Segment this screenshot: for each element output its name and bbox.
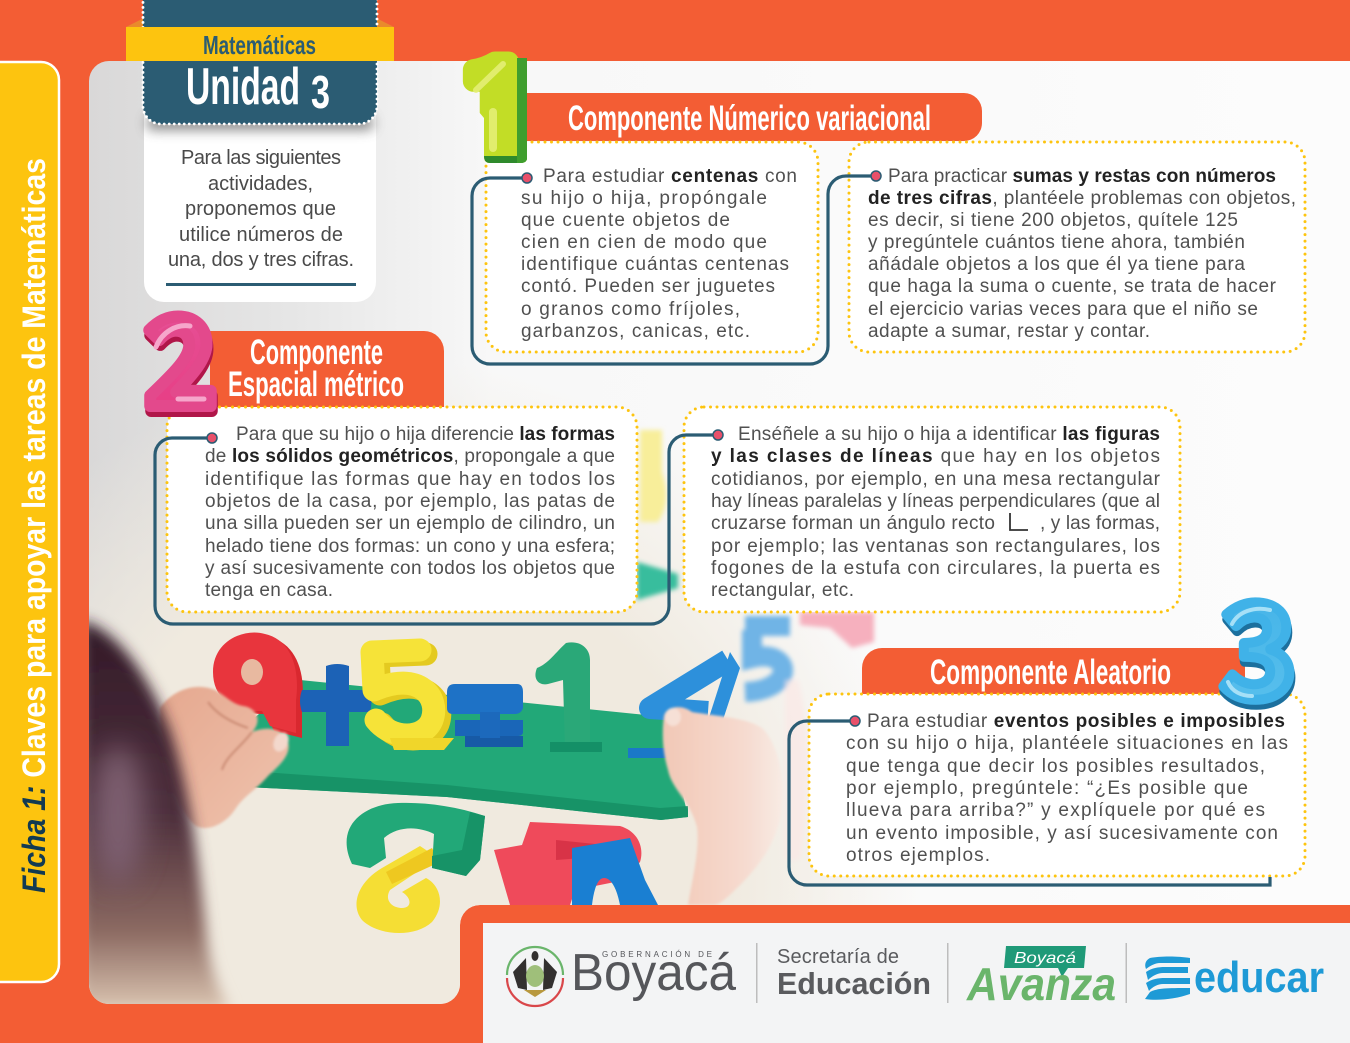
divider 3: [1126, 943, 1127, 1003]
heading bar 3: [862, 648, 1245, 698]
photo: yellow six on table: [356, 846, 440, 933]
box 2 white dotted: [849, 142, 1305, 352]
text: box 1: o granos como fríjoles,: [521, 299, 740, 320]
connector line box 5: [789, 716, 1270, 885]
photo: red four on table: [494, 822, 641, 905]
connector line boxes 1 and 2: [472, 171, 881, 364]
text: box 5: Para estudiar eventos posibles e imposibles: [867, 711, 1285, 732]
heading 2 text: Componente: [250, 333, 383, 372]
text: box 5: otros ejemplos.: [846, 845, 990, 866]
intro text: una, dos y tres cifras.: [168, 249, 354, 271]
photo: blue plus: [300, 664, 372, 746]
number 1: [462, 52, 527, 163]
text: box 4: cotidianos, por ejemplo, en una mesa rectangular: [711, 469, 1161, 490]
intro text: Para las siguientes: [181, 147, 341, 169]
intro text: [168, 147, 354, 271]
divider 2: [947, 943, 948, 1003]
text: box 4: rectangular, etc.: [711, 580, 854, 601]
text: box 2: [868, 166, 1296, 342]
photo: blue four: [650, 660, 728, 712]
text: box 4: fogones de la estufa con circulares, la puerta es: [711, 558, 1160, 579]
text: box 1: garbanzos, canicas, etc.: [521, 321, 750, 342]
text: box 4: hay líneas paralelas y líneas perpendiculares (que al: [711, 491, 1160, 512]
text: box 2: de tres cifras, plantéele problemas con objetos,: [868, 188, 1296, 209]
text: box 2: que haga la suma o cuente, se trata de hacer: [868, 276, 1277, 297]
text: box 2: añádale objetos a los que él ya tiene para: [868, 254, 1245, 275]
heading bar 2: [210, 331, 444, 410]
text: box 5: [846, 711, 1288, 866]
connector line boxes 3 and 4: [155, 430, 723, 624]
subject label: Matemáticas: [203, 30, 316, 60]
text: box 4: cruzarse forman un ángulo recto: [711, 513, 995, 534]
photo: blue letter on table: [572, 838, 658, 905]
box 5 white dotted: [809, 694, 1305, 876]
photo: blue equals: [447, 684, 523, 714]
number 3: 3: [1220, 548, 1297, 736]
logo: educar: [1145, 953, 1324, 1002]
text: box 3: y así sucesivamente con todos los objetos que: [205, 558, 615, 579]
heading 3 text: Componente Aleatorio: [930, 653, 1171, 692]
photo: left hand: [160, 687, 292, 828]
blue tab: [143, 0, 377, 124]
unit title: 3: [311, 66, 330, 118]
intro text: proponemos que: [185, 198, 336, 220]
text: box 3: de los sólidos geométricos, propongale a que: [205, 446, 615, 467]
logo: Secretaría de Educación: Educación: [777, 966, 931, 1001]
photo: blurred background numbers: [635, 427, 876, 706]
text: box 5: que tenga que decir los posibles resultados,: [846, 756, 1265, 777]
text: box 1: su hijo o hija, propóngale: [521, 188, 767, 209]
text: box 5: con su hijo o hija, plantéele situaciones en las: [846, 733, 1288, 754]
photo: right hand: [663, 707, 783, 905]
text: box 1: identifique cuántas centenas: [521, 254, 789, 275]
logo: escudo Boyacá: [507, 947, 563, 1006]
logo: Boyacá Avanza: Avanza: [966, 958, 1116, 1010]
intro text: actividades,: [208, 173, 313, 195]
box 3 white dotted: [167, 407, 637, 612]
text: box 4: y las clases de líneas que hay en los objetos: [711, 446, 1160, 467]
text: box 1: Para estudiar centenas con: [543, 166, 797, 187]
header tab: Unidad 3: [126, 0, 394, 130]
logo: educar: educar: [1194, 953, 1324, 1002]
sidebar: yellow vertical tab: [0, 62, 59, 982]
text: box 3: identifique las formas que hay en todos los: [205, 469, 615, 490]
heading 1 text: Componente Númerico variacional: [568, 99, 931, 138]
orange folds: [126, 18, 394, 27]
logo: Secretaría de Educación: Secretaría de: [777, 946, 899, 968]
text: box 4: , y las formas,: [1040, 513, 1160, 534]
number 1: 1: [460, 7, 534, 188]
unit title: Unidad: [186, 58, 300, 116]
text: box 2: adapte a sumar, restar y contar.: [868, 321, 1150, 342]
number 2: 2: [145, 265, 217, 442]
text: box 2: el ejercicio varias veces para que el niño se: [868, 299, 1258, 320]
intro card: [144, 110, 376, 302]
icon: right angle: [1010, 513, 1028, 530]
text: box 5: un evento imposible, y así sucesivamente con: [846, 823, 1278, 844]
text: box 5: llueva para arriba?” y explíquele por qué es: [846, 800, 1265, 821]
text: box 3: Para que su hijo o hija diferencie las formas: [236, 424, 615, 445]
photo: yellow five: [372, 650, 440, 739]
photo: red nine: [250, 641, 303, 738]
logo: Secretaría de Educación: [777, 946, 931, 1001]
footer panel: [460, 905, 1350, 1043]
text: box 2: Para practicar sumas y restas con números: [888, 166, 1276, 187]
text: box 1: [521, 166, 797, 342]
text: box 3: [205, 424, 615, 601]
heading bar 1: [505, 93, 982, 141]
text: box 4: por ejemplo; las ventanas son rectangulares, los: [711, 536, 1160, 557]
text: box 4: [711, 424, 1161, 601]
sidebar title: Ficha 1: Claves para apoyar las tareas de Matemáticas: [16, 158, 52, 893]
text: box 5: por ejemplo, pregúntele: “¿Es posible que: [846, 778, 1248, 799]
logo: Gobernación de Boyacá: Boyacá: [571, 944, 736, 1002]
text: box 3: una silla pueden ser un ejemplo de cilindro, un: [205, 513, 615, 534]
text: box 2: es decir, si tiene 200 objetos, quítele 125: [868, 210, 1238, 231]
text: box 4: Enséñele a su hijo o hija a identificar las figuras: [738, 424, 1160, 445]
logo: Boyacá Avanza: Boyacá: [1014, 950, 1076, 967]
text: box 3: helado tiene dos formas: un cono y una esfera;: [205, 536, 615, 557]
photo: green three on table: [347, 803, 485, 876]
text: box 3: tenga en casa.: [205, 580, 333, 601]
divider 1: [756, 943, 758, 1003]
yellow band: [126, 27, 394, 61]
photo: green foam tray: [224, 680, 688, 820]
text: box 1: contó. Pueden ser juguetes: [521, 276, 775, 297]
text: box 1: cien en cien de modo que: [521, 232, 767, 253]
heading bar 2: Espacial métrico: [228, 365, 404, 404]
intro underline: [166, 283, 356, 286]
text: box 2: y pregúntele cuántos tiene ahora, también: [868, 232, 1245, 253]
text: box 1: que cuente objetos de: [521, 210, 730, 231]
text: box 3: objetos de la casa, por ejemplo, las patas de: [205, 491, 615, 512]
box 4 white dotted: [684, 407, 1180, 612]
intro text: utilice números de: [179, 224, 343, 246]
box 1 white dotted: [486, 142, 818, 352]
photo: green one: [535, 642, 590, 710]
logo: Gobernación de Boyacá: GOBERNACIÓN DE: [602, 950, 712, 959]
photo: blurred child's head: [80, 620, 230, 1010]
